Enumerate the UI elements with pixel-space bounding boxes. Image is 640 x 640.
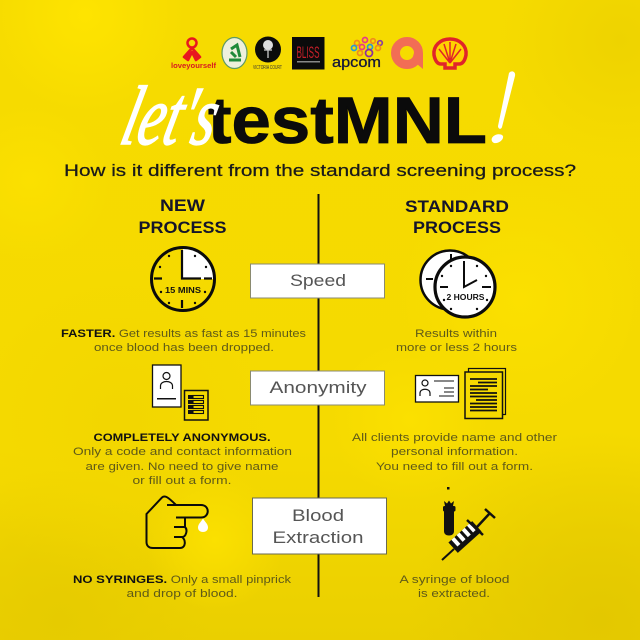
text: syringe of blood: is extracted. [418, 588, 490, 600]
text: faster: once blood has been dropped. [94, 342, 274, 354]
text: results within 2 hours [396, 328, 518, 354]
text: no syringes: NO SYRINGES. Only a small pinprick [73, 574, 292, 586]
logo: loveyourself [171, 38, 217, 70]
logo: orange A [396, 42, 423, 69]
text: no syringes: and drop of blood. [126, 588, 238, 600]
heading: standard process: PROCESS [413, 218, 501, 237]
text: standard personal information: personal information. [391, 446, 518, 458]
subtitle question: How is it different from the standard screening process? [64, 161, 576, 180]
text: completely anonymous [73, 432, 292, 487]
text: completely anonymous: Only a code and contact information [73, 446, 292, 458]
icon: 15 minute clock: 15 MINS [165, 286, 202, 295]
label box: speed [250, 264, 384, 298]
text: no syringes [73, 574, 292, 600]
text: results within 2 hours: more or less 2 hours [396, 342, 518, 354]
text: completely anonymous: are given. No need to give name [86, 461, 278, 473]
text: standard personal information [352, 432, 557, 473]
text: standard personal information: All clients provide name and other [352, 432, 557, 444]
label box: blood extraction: Blood [292, 506, 344, 525]
text: syringe of blood [400, 574, 510, 600]
icon: 2 hour clocks [420, 250, 495, 317]
heading: standard process [405, 197, 509, 237]
label box: blood extraction [252, 498, 386, 554]
logo: Victoria Court: VICTORIA COURT [253, 65, 282, 71]
icon: 2 hour clocks: 2 HOURS [446, 293, 485, 302]
logo: Victoria Court [253, 36, 282, 71]
heading: new process: NEW [160, 196, 206, 215]
logo: Shell [434, 39, 466, 68]
title [113, 70, 515, 163]
label box: anonymity [250, 371, 384, 405]
heading: new process: PROCESS [138, 218, 226, 237]
icon: pointing hand with blood drop [146, 496, 208, 548]
text: results within 2 hours: Results within [415, 328, 497, 340]
text: completely anonymous: or fill out a form. [132, 475, 232, 487]
text: faster [61, 328, 307, 354]
label box: speed: Speed [290, 271, 346, 290]
icon: test tube and syringe [442, 487, 495, 560]
title: testMNL [208, 83, 487, 157]
logo: Bliss: BLISS [296, 43, 320, 62]
center divider line [318, 194, 320, 597]
text: faster: FASTER. Get results as fast as 15 minutes [61, 328, 307, 340]
text: standard personal information: You need to fill out a form. [376, 461, 533, 473]
icon: code card and small form [152, 365, 208, 420]
title: let's [113, 70, 229, 163]
logo: apcom [332, 38, 382, 71]
logo: apcom: apcom [332, 54, 381, 71]
label box: blood extraction: Extraction [272, 528, 364, 547]
logo: loveyourself: loveyourself [171, 63, 217, 70]
label box: anonymity: Anonymity [270, 378, 367, 397]
icon: ID card and form stack [416, 368, 506, 418]
heading: new process [138, 196, 226, 237]
icon: 15 minute clock [152, 248, 214, 310]
logo: green seal [222, 38, 247, 68]
text: completely anonymous: COMPLETELY ANONYMOUS. [94, 432, 270, 444]
logo: Bliss [292, 37, 324, 70]
heading: standard process: STANDARD [405, 197, 509, 216]
logo row [171, 36, 466, 71]
text: syringe of blood: A syringe of blood [400, 574, 510, 586]
